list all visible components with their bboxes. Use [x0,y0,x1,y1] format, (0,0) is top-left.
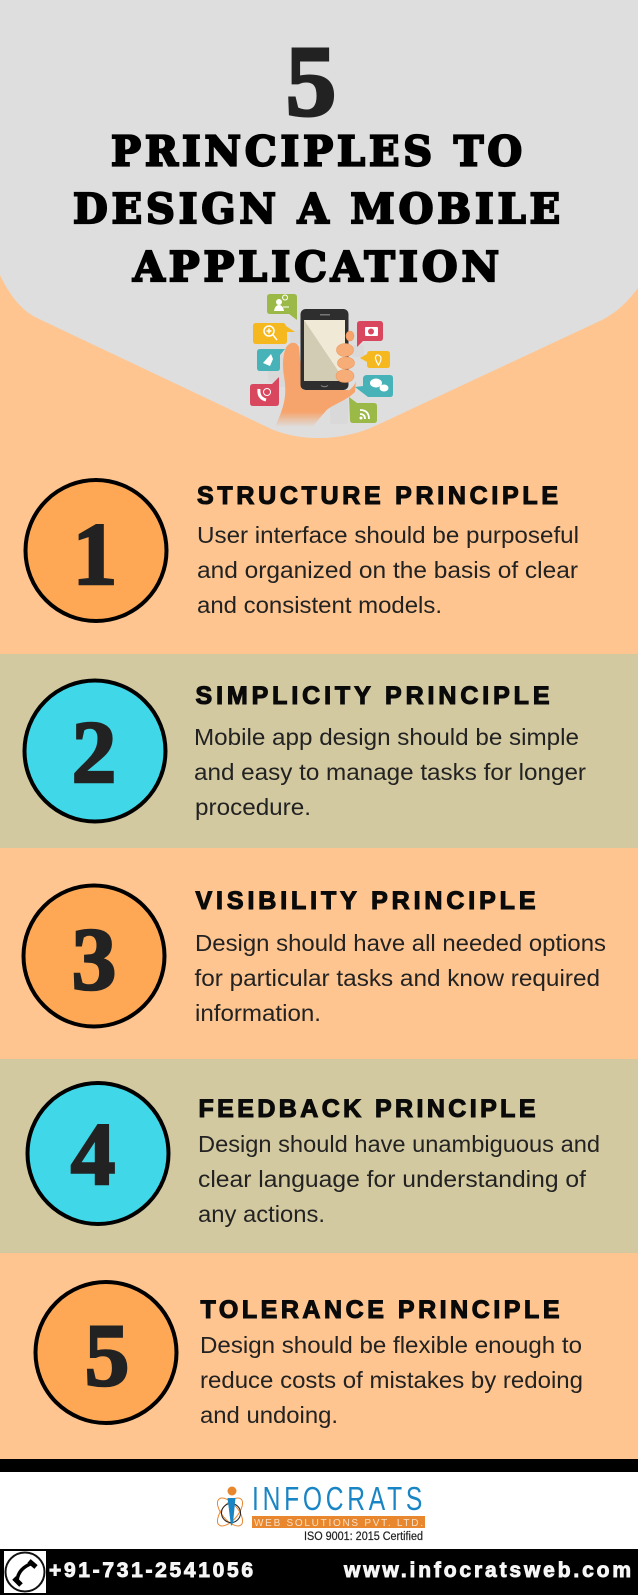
heading: VISIBILITY PRINCIPLE [196,887,536,915]
bubble: map pin [360,351,390,368]
body text: procedure. [195,794,311,820]
panel: visibility principle [24,886,606,1026]
panel: simplicity principle [0,654,638,848]
body text [198,1131,600,1227]
body text: Design should have all needed options [195,930,606,956]
number badge 3: 3 [72,911,116,1009]
phone number: +91-731-2541056 [49,1559,253,1582]
body text: User interface should be purposeful [197,522,579,548]
hand [275,343,356,427]
panel: feedback principle [0,1059,638,1253]
heading: STRUCTURE PRINCIPLE [197,482,558,510]
body text [194,930,606,1026]
number badge 4: 4 [71,1106,115,1204]
number badge 2 [24,680,166,822]
body text [200,1332,583,1428]
body text: Design should have unambiguous and [198,1131,600,1157]
black divider [0,1459,638,1472]
number badge 5 [36,1282,176,1423]
number badge 2: 2 [72,704,116,802]
panel: tolerance principle [36,1282,583,1428]
number badge 3 [24,886,164,1026]
band background [0,654,638,848]
bubble: call [250,377,279,406]
body text: and organized on the basis of clear [197,557,578,583]
body text: and consistent models. [197,592,442,618]
logo mark [213,1486,247,1530]
black background [0,1549,638,1595]
phone [300,309,348,390]
company name: INFOCRATS [252,1480,426,1517]
body text: information. [195,1000,321,1026]
heading: SIMPLICITY PRINCIPLE [196,682,550,710]
title [73,128,564,291]
body text: clear language for understanding of [198,1166,586,1192]
title: PRINCIPLES TO [111,128,526,176]
bubble: bird [257,349,285,371]
bubble: magnifier [253,323,295,344]
icon: phone [4,1551,46,1593]
band background [0,1059,638,1253]
illustration: hand holding phone with app bubbles [250,294,393,427]
number badge 5: 5 [85,1307,129,1405]
logo panel [0,1472,638,1549]
heading: FEEDBACK PRINCIPLE [198,1095,536,1123]
bubble: camera [357,321,383,347]
tagline bar: WEB SOLUTIONS PVT. LTD. [254,1518,423,1529]
body text: Mobile app design should be simple [194,724,579,750]
body text: Design should be flexible enough to [200,1332,582,1358]
body text: for particular tasks and know required [194,965,600,991]
number badge 1: 1 [73,506,117,604]
body text: reduce costs of mistakes by redoing [200,1367,583,1393]
fingers [336,331,354,382]
certification: ISO 9001: 2015 Certified [304,1531,423,1543]
body text: any actions. [198,1201,325,1227]
body text: and undoing. [200,1402,338,1428]
faint background icons [268,330,364,424]
number badge 1 [26,480,166,621]
big number 5: 5 [286,25,336,137]
body text [194,724,586,820]
white background [0,1472,638,1549]
body text [197,522,579,618]
bubble: chat [355,375,393,397]
bubble: people [267,294,297,320]
body text: and easy to manage tasks for longer [194,759,586,785]
number badge 4 [28,1083,168,1224]
title: DESIGN A MOBILE [73,185,564,233]
bubble: rss [349,397,377,423]
website: www.infocratsweb.com [343,1559,631,1582]
header panel [0,0,638,438]
title: APPLICATION [132,243,503,291]
panel: structure principle [26,480,579,621]
contact footer [0,1549,638,1595]
grey header shape [0,0,638,438]
heading: TOLERANCE PRINCIPLE [200,1296,560,1324]
